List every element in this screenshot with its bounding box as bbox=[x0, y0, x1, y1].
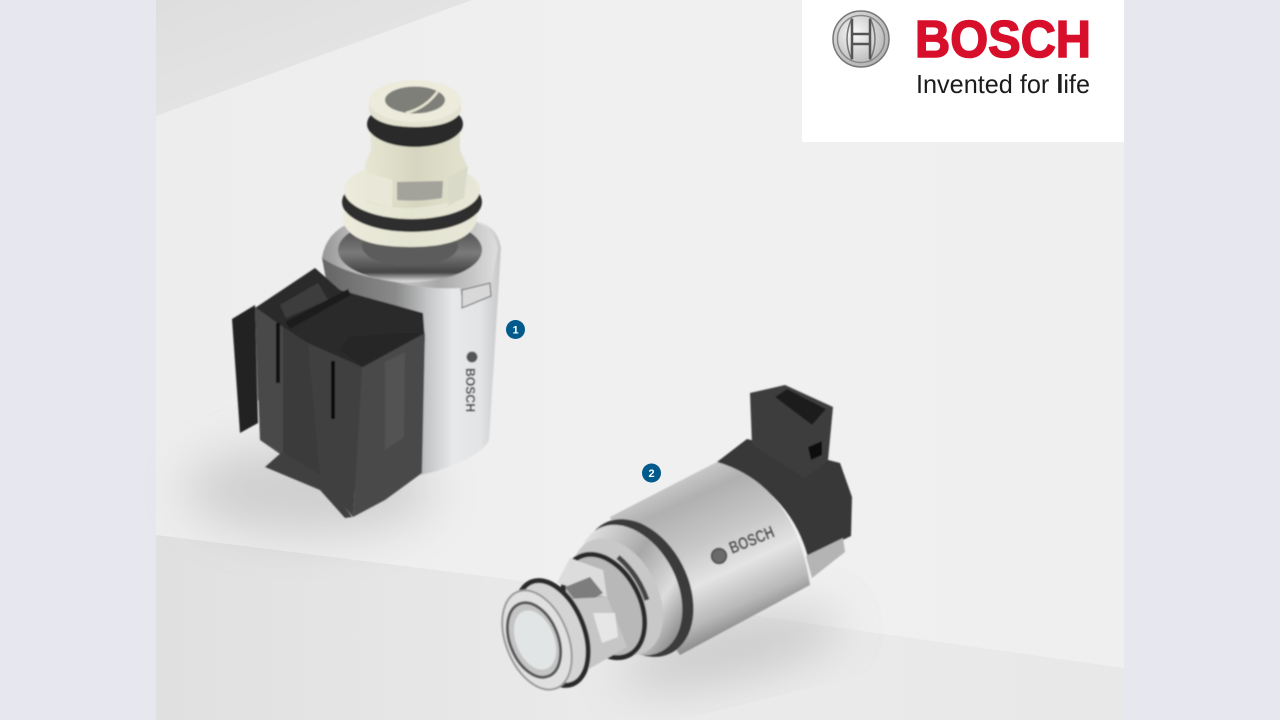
hex notch right bbox=[448, 166, 468, 206]
front block left face bbox=[308, 343, 362, 517]
logo tagline: Invented for life bbox=[916, 69, 1090, 99]
valve shaft bbox=[545, 597, 627, 680]
housing brand text: BOSCH bbox=[463, 368, 478, 412]
logo emblem bbox=[833, 11, 889, 67]
logo wordmark: BOSCH bbox=[915, 11, 1091, 69]
number badge 2: 2 bbox=[648, 468, 655, 480]
shaft tab bbox=[593, 613, 618, 643]
connector top strip bbox=[285, 289, 351, 329]
cap top face bbox=[369, 80, 461, 122]
hex notch left bbox=[366, 172, 392, 208]
large metal disc bbox=[557, 507, 703, 673]
body brand text: BOSCH bbox=[726, 522, 777, 558]
rear slot bbox=[618, 557, 647, 600]
disc slot bbox=[406, 91, 438, 113]
metal body bbox=[610, 462, 810, 655]
filter screen window bbox=[397, 181, 443, 201]
front face bbox=[506, 604, 564, 676]
connector tower bbox=[750, 385, 833, 478]
upper o-ring bbox=[367, 101, 463, 147]
lower o-ring bbox=[342, 172, 482, 232]
valve shaft dome bbox=[557, 558, 607, 597]
shaft hex block bbox=[565, 577, 603, 607]
connector foot bbox=[265, 452, 352, 518]
number badge 1 bbox=[506, 320, 525, 339]
panel: studio backdrop bbox=[156, 0, 1124, 720]
connector left plate bbox=[232, 305, 258, 433]
housing top rim bbox=[322, 222, 498, 300]
solenoid valve 1 bbox=[232, 80, 501, 518]
front flange bbox=[489, 580, 585, 700]
number badge 2 bbox=[642, 464, 661, 482]
shadow: solenoid 1 bbox=[185, 445, 435, 535]
number badge 1: 1 bbox=[512, 324, 519, 336]
recessed metal seat bbox=[338, 218, 482, 282]
connector tower top opening bbox=[775, 389, 826, 425]
front ring bbox=[497, 595, 571, 685]
body brand mark bbox=[712, 548, 726, 564]
side panel bbox=[385, 352, 405, 450]
inner metal sleeve bbox=[362, 226, 458, 266]
metal end cap bbox=[806, 538, 845, 578]
connector housing bbox=[717, 439, 852, 557]
housing brand mark bbox=[466, 352, 478, 362]
solenoid valve 2 bbox=[489, 385, 852, 700]
cream flange bbox=[344, 161, 480, 219]
lower cream disc bbox=[343, 212, 477, 247]
slot line left bbox=[276, 323, 280, 383]
connector socket bbox=[808, 441, 822, 460]
connector rear block bbox=[255, 268, 425, 500]
body collar groove bbox=[560, 500, 716, 676]
slot line right bbox=[331, 361, 335, 419]
retaining tab bbox=[462, 283, 491, 308]
connector wall middle bbox=[283, 327, 322, 478]
front opening bbox=[340, 333, 425, 367]
cream neck bbox=[365, 128, 467, 208]
metal housing bbox=[322, 222, 501, 480]
cream top cap bbox=[369, 100, 461, 127]
rear o-ring bbox=[547, 541, 661, 671]
connector rear opening bbox=[280, 283, 328, 318]
shadow: solenoid 2 bbox=[612, 595, 848, 705]
front block right face bbox=[353, 333, 425, 517]
connector wall left bbox=[255, 307, 283, 456]
top filter disc bbox=[385, 86, 445, 114]
front o-ring bbox=[502, 570, 602, 696]
disc inner step bbox=[552, 523, 682, 671]
logo panel bbox=[802, 0, 1124, 142]
